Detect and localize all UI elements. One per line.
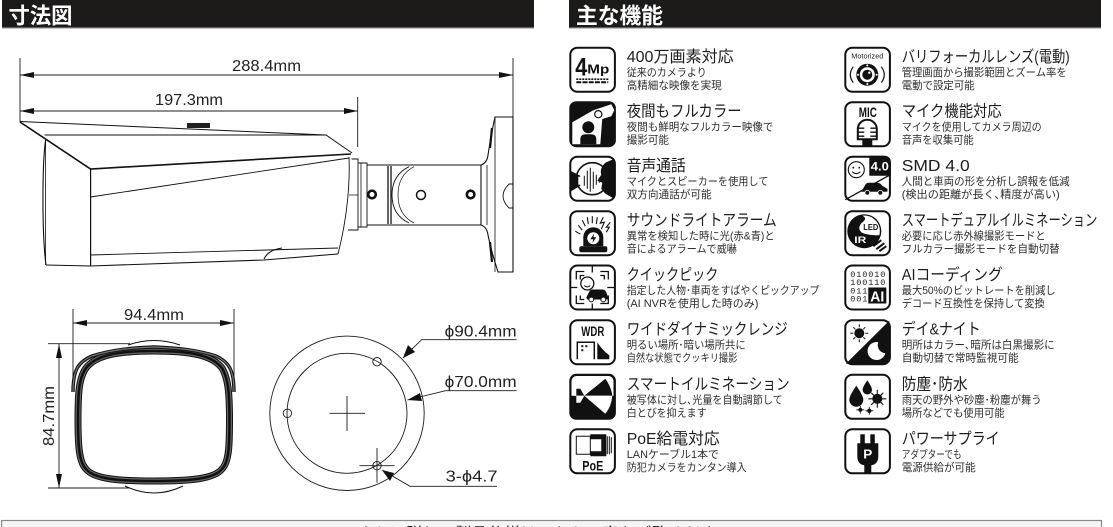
feature: day and night bbox=[845, 320, 1055, 365]
feature: WDR bbox=[570, 320, 788, 365]
feature: sound light alarm bbox=[570, 211, 777, 256]
text: microphone: 音声を収集可能 bbox=[902, 134, 974, 147]
mounting plate drawing bbox=[270, 324, 517, 490]
text: PoE bbox=[627, 430, 747, 474]
text: microphone: マイクを使用してカメラ周辺の bbox=[902, 121, 1042, 134]
leader: diameter 90.4mm: ϕ90.4mm bbox=[445, 324, 517, 340]
icon: AI coding: 011 bbox=[850, 286, 867, 296]
feature: SMD 4.0 bbox=[845, 156, 1070, 201]
text: quick pick: クイックピック bbox=[627, 266, 718, 284]
icon: smart dual illumination bbox=[845, 211, 890, 255]
text: motorized lens: 電動で設定可能 bbox=[902, 79, 975, 92]
panel: dimensions bbox=[2, 0, 534, 493]
text: AI coding: AIコーディング bbox=[902, 265, 1003, 284]
icon: power plug: P bbox=[863, 446, 873, 461]
icon: AI coding: AI bbox=[870, 288, 884, 306]
text: PoE: 防犯カメラをカンタン導入 bbox=[627, 461, 747, 474]
text: night color: 夜間も鮮明なフルカラー映像で bbox=[627, 121, 773, 134]
text: SMD 4.0: (検出の距離が長く､精度が高い) bbox=[902, 188, 1060, 201]
icon: day and night bbox=[845, 320, 890, 364]
mounting circles bbox=[270, 336, 424, 490]
leader: diameter 70.0mm bbox=[407, 374, 517, 401]
icon: AI coding bbox=[845, 266, 890, 310]
text: dust and water proof: 雨天の野外や砂塵･粉塵が舞う bbox=[902, 393, 1042, 406]
feature: smart dual illumination bbox=[845, 211, 1097, 256]
dimension: body length 197.3mm: 197.3mm bbox=[155, 92, 223, 109]
text: smart illumination: 被写体に対し､光量を自動調節して bbox=[627, 393, 783, 406]
icon: smart dual illumination: LED bbox=[863, 222, 878, 232]
icon: motorized lens: Motorized bbox=[851, 52, 883, 61]
text: night color bbox=[627, 103, 773, 147]
icon: dust and water proof bbox=[845, 375, 890, 419]
text: power supply: パワーサプライ bbox=[902, 430, 1000, 448]
dimension: width 94.4mm: 94.4mm bbox=[124, 307, 184, 324]
text: microphone: マイク機能対応 bbox=[902, 103, 1002, 121]
text: smart dual illumination: 必要に応じ赤外線撮影モードと bbox=[902, 230, 1046, 243]
mount arm and plate bbox=[348, 117, 513, 272]
text: 4MP: 従来のカメラより bbox=[627, 66, 707, 79]
text: WDR: 自然な状態でクッキリ撮影 bbox=[627, 352, 738, 365]
icon: power plug bbox=[845, 429, 890, 473]
dimension: total length 288.4mm: 288.4mm bbox=[232, 58, 301, 75]
icon: WDR: WDR bbox=[581, 324, 604, 339]
text: night color: 撮影可能 bbox=[627, 134, 669, 147]
leader: 3 holes diameter 4.7: 3-ϕ4.7 bbox=[446, 469, 498, 486]
text: smart illumination: スマートイルミネーション bbox=[627, 375, 790, 393]
icon: alarm bbox=[570, 211, 615, 255]
text: AI coding: デコード互換性を保持して変換 bbox=[902, 297, 1045, 310]
text: AI coding: 最大50%のビットレートを削減し bbox=[902, 284, 1056, 297]
text: PoE: LANケーブル1本で bbox=[627, 448, 719, 461]
icon: microphone: MIC bbox=[859, 105, 877, 120]
feature: power supply bbox=[845, 429, 1000, 474]
dimension: total length 288.4mm bbox=[20, 58, 513, 122]
feature: dust and water proof bbox=[845, 375, 1042, 419]
icon: AI coding: 010010 bbox=[850, 270, 885, 280]
icon: PoE bbox=[570, 429, 615, 473]
text: two-way audio: 双方向通話が可能 bbox=[627, 188, 712, 201]
text: quick pick bbox=[627, 266, 820, 310]
icon: 4Mp: Mp bbox=[587, 62, 609, 77]
icon: two-way audio bbox=[570, 157, 615, 201]
icon: 4Mp bbox=[570, 48, 615, 92]
text: 4MP bbox=[627, 48, 734, 92]
heading: dimensions: 寸法図 bbox=[8, 4, 72, 28]
icon: WDR bbox=[570, 320, 615, 364]
text: day and night bbox=[902, 320, 1055, 365]
text: day and night: 自動切替で常時監視可能 bbox=[902, 352, 1019, 365]
text: PoE: PoE給電対応 bbox=[627, 430, 720, 448]
icon: SMD 4.0: 4.0 bbox=[871, 160, 889, 174]
text: sound light alarm bbox=[627, 212, 777, 256]
text: quick pick: 指定した人物･車両をすばやくピックアップ bbox=[627, 284, 820, 297]
text: dust and water proof bbox=[902, 375, 1042, 419]
icon: quick pick bbox=[570, 266, 615, 310]
text: 4MP: 400万画素対応 bbox=[627, 48, 734, 66]
feature: motorized lens bbox=[845, 48, 1070, 92]
text: motorized lens: 管理画面から撮影範囲とズーム率を bbox=[902, 66, 1067, 79]
text: power supply bbox=[902, 430, 1000, 474]
text: dust and water proof: 防塵･防水 bbox=[902, 375, 968, 393]
dimension: width 94.4mm bbox=[73, 307, 234, 380]
text: SMD 4.0: 人間と車両の形を分析し誤報を低減 bbox=[902, 175, 1070, 188]
text: sound light alarm: 音によるアラームで威嚇 bbox=[627, 243, 737, 256]
text: WDR: ワイドダイナミックレンジ bbox=[627, 321, 788, 339]
feature: quick pick bbox=[570, 266, 820, 310]
text: sound light alarm: サウンドライトアラーム bbox=[627, 212, 777, 230]
text: SMD 4.0: SMD 4.0 bbox=[902, 158, 970, 175]
bottom note box bbox=[2, 520, 1102, 527]
front view camera drawing bbox=[41, 307, 234, 493]
icon: PoE: PoE bbox=[582, 457, 603, 473]
text: motorized lens bbox=[902, 48, 1070, 92]
text: dust and water proof: 場所などでも使用可能 bbox=[902, 406, 1005, 419]
icon: microphone bbox=[845, 102, 890, 146]
text: sound light alarm: 異常を検知した時に光(赤&青)と bbox=[627, 230, 775, 243]
icon: AI coding: 100110 bbox=[850, 278, 885, 288]
feature: 4MP bbox=[570, 48, 734, 92]
dimension: height 84.7mm: 84.7mm bbox=[41, 386, 58, 446]
icon: motorized lens bbox=[845, 48, 890, 92]
text: power supply: 電源供給が可能 bbox=[902, 461, 976, 474]
text: WDR: 明るい場所･暗い場所共に bbox=[627, 339, 746, 352]
text: quick pick: (AI NVRを使用した時のみ) bbox=[627, 297, 758, 310]
feature: AI coding bbox=[845, 265, 1056, 310]
text: smart dual illumination bbox=[902, 211, 1097, 256]
text: 4MP: 高精細な映像を実現 bbox=[627, 79, 722, 92]
leader: 3 holes diameter 4.7 bbox=[382, 469, 498, 486]
text: day and night: 明所はカラー､暗所は白黒撮影に bbox=[902, 339, 1055, 352]
text: AI coding bbox=[902, 265, 1056, 310]
icon: 4Mp: 4 bbox=[575, 54, 587, 82]
feature: two-way audio bbox=[570, 157, 768, 201]
heading: dimensions bbox=[2, 0, 534, 29]
dimension: height 84.7mm bbox=[41, 344, 130, 488]
side view camera drawing bbox=[20, 58, 513, 272]
text: two-way audio bbox=[627, 157, 768, 201]
dimension: body length 197.3mm bbox=[20, 92, 358, 147]
leader: diameter 90.4mm bbox=[403, 324, 517, 358]
feature: PoE bbox=[570, 429, 747, 474]
feature: night color bbox=[569, 101, 773, 147]
text: two-way audio: マイクとスピーカーを使用して bbox=[627, 175, 768, 188]
icon: smart dual illumination: IR bbox=[854, 235, 866, 246]
icon: SMD 4.0 bbox=[845, 156, 891, 201]
text: microphone bbox=[902, 103, 1042, 147]
text: motorized lens: バリフォーカルレンズ(電動) bbox=[902, 48, 1070, 66]
camera front outline bbox=[73, 340, 234, 493]
feature: microphone bbox=[845, 102, 1042, 147]
text: smart illumination: 白とびを抑えます bbox=[627, 406, 707, 419]
heading: main features: 主な機能 bbox=[576, 4, 663, 28]
text: smart dual illumination: フルカラー撮影モードを自動切替 bbox=[902, 243, 1060, 256]
icon: smart illumination bbox=[569, 374, 616, 420]
text: power supply: アダプターでも bbox=[902, 448, 962, 461]
feature: smart illumination bbox=[569, 374, 790, 420]
panel: main features bbox=[569, 0, 1101, 474]
heading: main features bbox=[569, 0, 1101, 29]
text: SMD 4.0 bbox=[902, 158, 1070, 201]
leader: diameter 70.0mm: ϕ70.0mm bbox=[445, 374, 517, 391]
icon: AI coding: 001 bbox=[850, 294, 867, 304]
text: WDR bbox=[627, 321, 788, 365]
text: smart illumination bbox=[627, 375, 790, 419]
text: day and night: デイ&ナイト bbox=[902, 320, 981, 339]
camera body bbox=[20, 122, 352, 266]
text: two-way audio: 音声通話 bbox=[627, 157, 686, 175]
icon: night color bbox=[569, 101, 616, 147]
text: night color: 夜間もフルカラー bbox=[627, 103, 742, 121]
